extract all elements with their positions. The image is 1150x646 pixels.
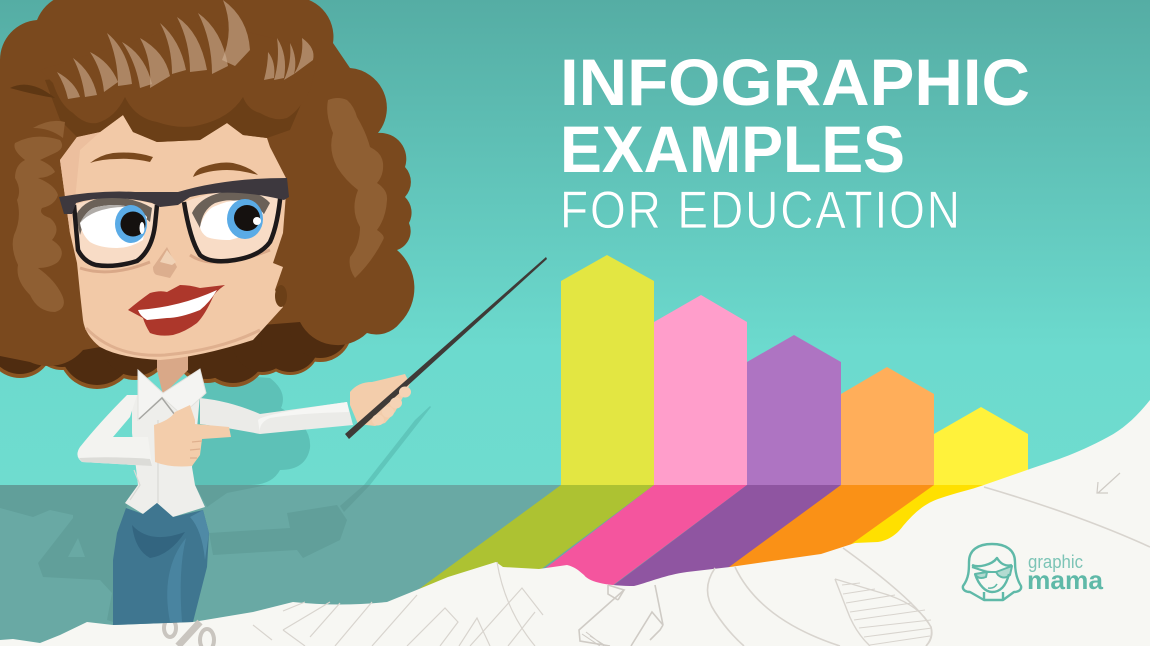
face bbox=[60, 115, 287, 360]
doodle: ruled lines and boxes bbox=[253, 562, 543, 646]
hair back bbox=[0, 292, 373, 389]
bar 3 purple bbox=[747, 335, 841, 485]
logo: graphic mama bbox=[963, 544, 1104, 600]
bar shadows on floor bbox=[415, 485, 1028, 595]
hair fringe top bbox=[40, 20, 320, 127]
hand holding pointer bbox=[345, 257, 547, 439]
character shadow on wall and floor bbox=[0, 372, 431, 622]
floor bbox=[0, 485, 1150, 646]
paper sketch doodles bbox=[253, 473, 1150, 646]
doodle: percent sign bbox=[164, 619, 214, 646]
background wall bbox=[0, 0, 1150, 485]
bar 2 pink bbox=[654, 295, 747, 485]
pointing arm bbox=[200, 398, 353, 434]
hair fringe shadow bbox=[45, 60, 305, 142]
hair main mass bbox=[0, 0, 414, 366]
nose bbox=[153, 247, 177, 278]
eyebrow left bbox=[90, 152, 153, 163]
pointer stick bbox=[345, 257, 547, 439]
bar 4 orange bbox=[841, 367, 934, 485]
title line 1: INFOGRAPHIC bbox=[560, 45, 1030, 119]
bar chart: five house-shaped coloured bars bbox=[415, 255, 1028, 595]
neck bbox=[157, 350, 188, 395]
eyebrow right bbox=[193, 162, 258, 177]
hair dark bump by cheek bbox=[275, 285, 287, 307]
icon: small arrow bbox=[1097, 473, 1120, 493]
logo word: graphic: graphic bbox=[1028, 552, 1083, 572]
shadow under glasses bbox=[80, 250, 270, 272]
torso bbox=[125, 395, 205, 517]
left lens and eye bbox=[74, 197, 157, 266]
folded arm bbox=[77, 395, 152, 466]
pointing hand bbox=[154, 405, 231, 466]
title bbox=[560, 45, 1030, 240]
character: teacher bbox=[0, 0, 547, 625]
subtitle: FOR EDUCATION bbox=[560, 181, 960, 240]
title line 2: EXAMPLES bbox=[560, 112, 905, 186]
doodle: hatched slice bbox=[835, 579, 932, 646]
logo word: mama: mama bbox=[1027, 565, 1104, 595]
glasses bbox=[59, 178, 289, 266]
hair side curl right bbox=[327, 98, 387, 278]
torn paper foreground bbox=[0, 400, 1150, 646]
bar 5 yellow bbox=[934, 407, 1028, 485]
skirt bbox=[113, 503, 209, 625]
hair shine strands bbox=[57, 0, 314, 99]
doodle: large pie curves bbox=[708, 487, 1150, 646]
doodle: 3D arrow bbox=[579, 585, 663, 646]
collar bbox=[138, 369, 206, 420]
fingers bbox=[372, 386, 411, 426]
icon: mama face bbox=[963, 544, 1021, 600]
right lens and eye bbox=[184, 189, 279, 261]
blouse bbox=[77, 350, 353, 517]
bar 1 yellow-green bbox=[561, 255, 654, 485]
hair small highlight left bbox=[33, 121, 65, 138]
lips bbox=[128, 285, 225, 336]
hair side curl left bbox=[13, 137, 64, 312]
hair shadow left bbox=[10, 85, 55, 98]
